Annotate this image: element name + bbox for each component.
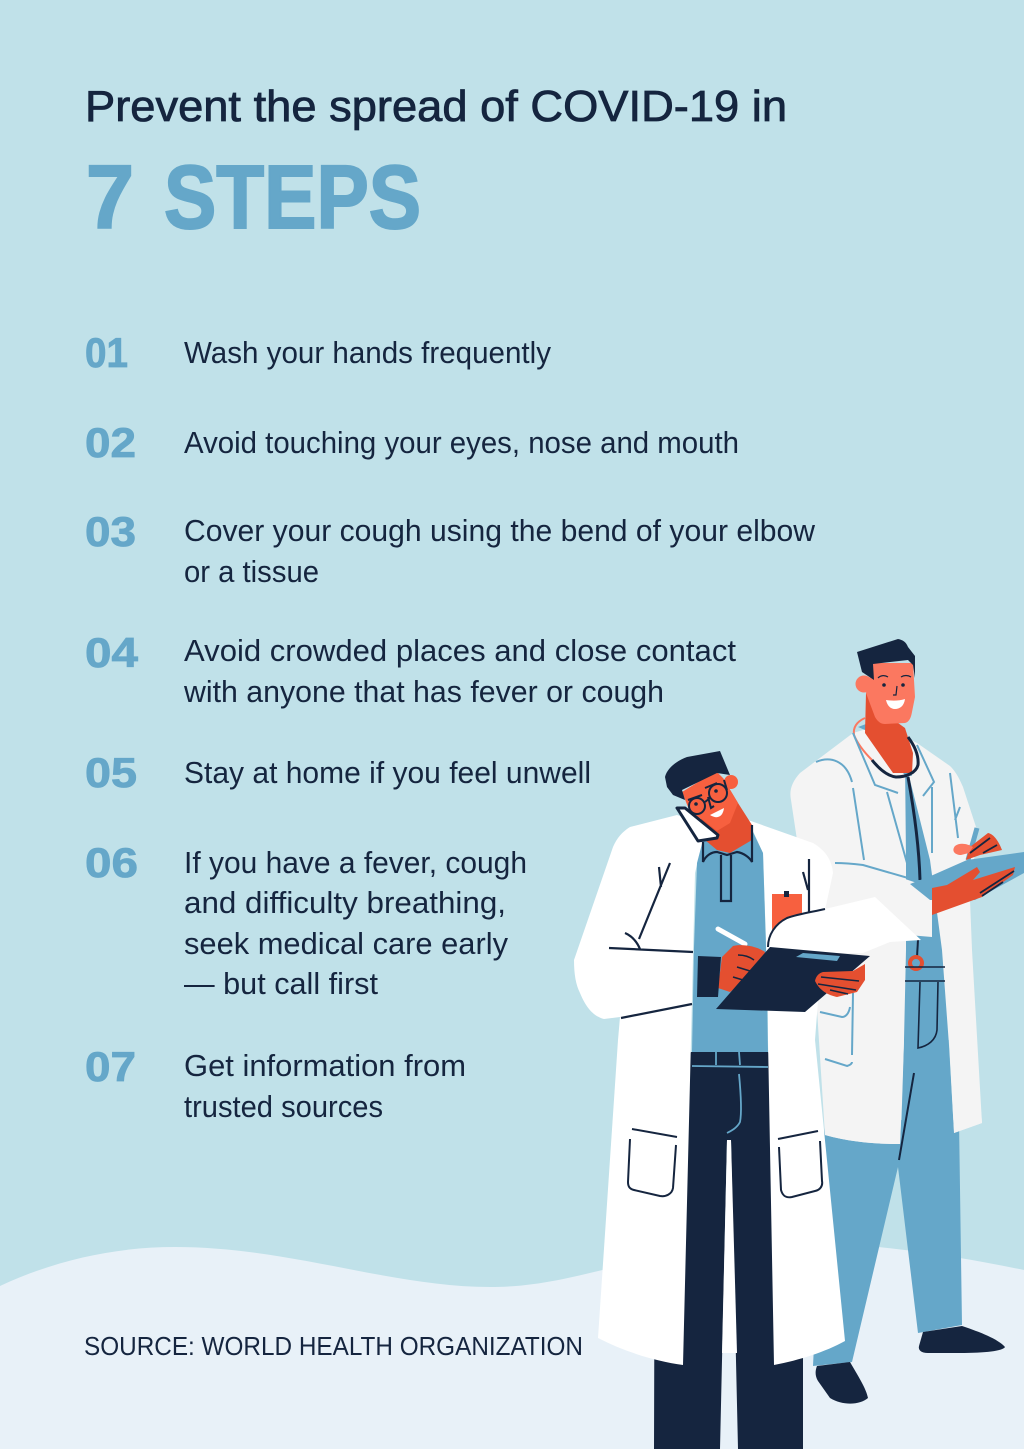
- step 06: and difficulty breathing,: [184, 885, 506, 920]
- step 04: 04: [85, 629, 139, 676]
- lab coat: [574, 815, 845, 1365]
- step 02: 02: [85, 419, 136, 466]
- step 02: [85, 419, 739, 466]
- step 01: [85, 329, 551, 376]
- step 04: with anyone that has fever or cough: [183, 674, 664, 709]
- title: Prevent the spread of COVID-19 in: [85, 82, 787, 131]
- ground wave: [0, 1244, 1024, 1449]
- trousers: [654, 1052, 803, 1449]
- step 06: [85, 839, 527, 1001]
- pocket lines: [628, 1129, 822, 1197]
- step 07: Get information from: [184, 1048, 466, 1083]
- holding hand: [815, 964, 865, 997]
- step 03: or a tissue: [184, 554, 319, 589]
- step 01: Wash your hands frequently: [184, 335, 551, 370]
- shirt: [692, 830, 768, 1052]
- writing hand: [718, 945, 765, 992]
- step 07: 07: [85, 1043, 136, 1090]
- hair: [665, 751, 730, 800]
- paper: [768, 897, 921, 953]
- pen: [718, 929, 745, 944]
- step 03: Cover your cough using the bend of your elbow: [184, 513, 816, 548]
- step 07: [85, 1043, 466, 1124]
- belt: [691, 1052, 768, 1067]
- step 03: [85, 508, 816, 589]
- headline: 7 steps: STEPS: [164, 148, 421, 248]
- illustration: back doctor: [790, 639, 1024, 1404]
- illustration: front doctor: [574, 751, 921, 1449]
- clipboard: [716, 947, 870, 1012]
- step 01: 01: [85, 329, 128, 376]
- clipboard and hands: [910, 828, 1024, 915]
- phone: [677, 808, 718, 841]
- glasses: [688, 780, 727, 814]
- neck: [700, 778, 752, 853]
- step 04: Avoid crowded places and close contact: [184, 633, 736, 668]
- step 02: Avoid touching your eyes, nose and mouth: [184, 425, 739, 460]
- step 05: 05: [85, 749, 137, 796]
- step 06: If you have a fever, cough: [184, 845, 527, 880]
- collar: [703, 825, 752, 901]
- smile: [710, 808, 724, 817]
- step 07: trusted sources: [184, 1089, 383, 1124]
- step 03: 03: [85, 508, 136, 555]
- cuff: [697, 956, 721, 997]
- sleeve lines: [609, 859, 809, 1018]
- step 04: [85, 629, 736, 709]
- headline: 7 steps: [86, 148, 421, 248]
- source credit: SOURCE: WORLD HEALTH ORGANIZATION: [84, 1331, 583, 1361]
- headline: 7 steps: 7: [86, 148, 134, 248]
- name badge: [772, 894, 802, 950]
- step 06: seek medical care early: [184, 926, 508, 961]
- face: [682, 771, 738, 831]
- coat back: [722, 1140, 737, 1353]
- step 05: Stay at home if you feel unwell: [184, 755, 591, 790]
- step 06: — but call first: [184, 966, 378, 1001]
- step 05: [85, 749, 591, 796]
- step 06: 06: [85, 839, 138, 886]
